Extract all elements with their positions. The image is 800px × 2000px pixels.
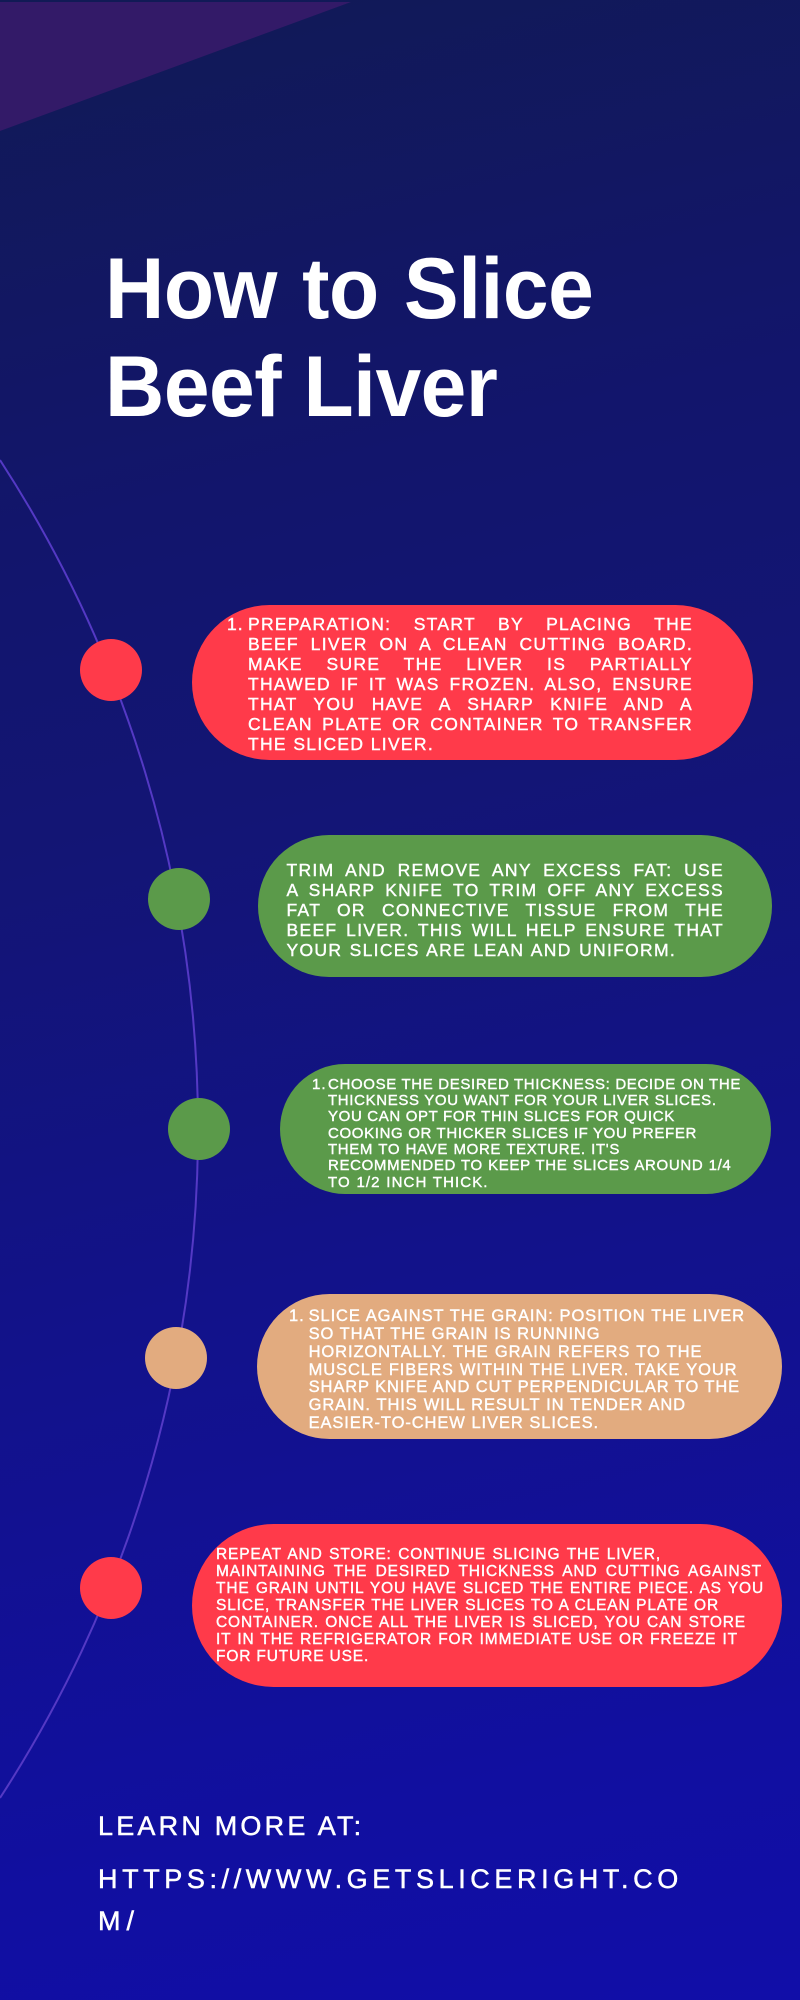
text: step 5: THE GRAIN UNTIL YOU HAVE SLICED THE ENTIRE PIECE. AS YOU [216,1580,764,1597]
text: step 2: BEEF LIVER. THIS WILL HELP ENSURE THAT [286,920,724,940]
text: step 2: TRIM AND REMOVE ANY EXCESS FAT: USE [286,860,724,880]
text: step 3 [312,1076,741,1191]
text: step 5: IT IN THE REFRIGERATOR FOR IMMEDIATE USE OR FREEZE IT [216,1631,738,1648]
title [105,241,593,435]
text: step 3: TO 1/2 INCH THICK. [328,1174,489,1191]
text: step 4: SLICE AGAINST THE GRAIN: POSITION THE LIVER [309,1307,745,1325]
text: step 3: THICKNESS YOU WANT FOR YOUR LIVER SLICES. [328,1092,717,1109]
text: step 4: HORIZONTALLY. THE GRAIN REFERS TO THE [309,1343,702,1361]
text: step 4: GRAIN. THIS WILL RESULT IN TENDER AND [309,1396,686,1414]
marker: step 5 [80,1557,142,1619]
text: step 5 [216,1546,764,1665]
footer: learn more [98,1811,683,1936]
text: step 5: SLICE, TRANSFER THE LIVER SLICES TO A CLEAN PLATE OR [216,1597,719,1614]
text: step 1: THAWED IF IT WAS FROZEN. ALSO, ENSURE [248,674,693,694]
text: step 3: RECOMMENDED TO KEEP THE SLICES AROUND 1/4 [328,1157,731,1174]
marker: step 1 [80,639,142,701]
panel: step 3 thickness: 1. [312,1076,326,1093]
text: step 1: MAKE SURE THE LIVER IS PARTIALLY [248,654,693,674]
text: step 2: FAT OR CONNECTIVE TISSUE FROM THE [286,900,724,920]
text: step 3: YOU CAN OPT FOR THIN SLICES FOR QUICK [328,1108,675,1125]
text: step 4 [289,1307,745,1432]
panel: step 3 thickness [280,1064,771,1194]
panel: step 4 slice against grain [257,1294,782,1439]
text: step 4: SO THAT THE GRAIN IS RUNNING [309,1325,600,1343]
marker: step 4 [145,1327,207,1389]
text: step 5: CONTAINER. ONCE ALL THE LIVER IS SLICED, YOU CAN STORE [216,1614,746,1631]
text: step 5: REPEAT AND STORE: CONTINUE SLICING THE LIVER, [216,1546,661,1563]
text: step 3: THEM TO HAVE MORE TEXTURE. IT'S [328,1141,620,1158]
text: step 2 [286,860,724,960]
text: step 4: EASIER-TO-CHEW LIVER SLICES. [309,1414,599,1432]
panel: step 1 preparation [192,605,753,760]
title: How to Slice [105,241,593,337]
text: step 4: SHARP KNIFE AND CUT PERPENDICULAR TO THE [309,1378,740,1396]
text: step 1: PREPARATION: START BY PLACING THE [248,614,693,634]
text: step 1: BEEF LIVER ON A CLEAN CUTTING BOARD. [248,634,693,654]
text: step 1: THAT YOU HAVE A SHARP KNIFE AND A [248,694,693,714]
text: step 2: YOUR SLICES ARE LEAN AND UNIFORM. [286,940,676,960]
panel: step 1 preparation: 1. [227,614,244,634]
text: step 3: CHOOSE THE DESIRED THICKNESS: DECIDE ON THE [328,1076,741,1093]
text: step 5: FOR FUTURE USE. [216,1648,369,1665]
text: step 4: MUSCLE FIBERS WITHIN THE LIVER. TAKE YOUR [309,1361,737,1379]
timeline arc [0,460,199,1798]
text: step 2: A SHARP KNIFE TO TRIM OFF ANY EXCESS [286,880,724,900]
panel: step 5 repeat and store [192,1524,782,1687]
marker: step 2 [148,868,210,930]
text: step 3: COOKING OR THICKER SLICES IF YOU PREFER [328,1125,697,1142]
title: Beef Liver [105,339,497,435]
footer: learn more: LEARN MORE AT: [98,1811,364,1841]
footer: learn more: HTTPS://WWW.GETSLICERIGHT.CO [98,1864,683,1894]
decorative purple triangle [0,2,350,131]
text: step 1: CLEAN PLATE OR CONTAINER TO TRANSFER [248,714,693,734]
marker: step 3 [168,1098,230,1160]
text: step 1: THE SLICED LIVER. [248,734,434,754]
panel: step 4 slice against grain: 1. [289,1307,305,1325]
footer: learn more: M/ [98,1906,140,1936]
text: step 1 [227,614,693,754]
text: step 5: MAINTAINING THE DESIRED THICKNESS AND CUTTING AGAINST [216,1563,762,1580]
panel: step 2 trim fat [258,835,772,977]
